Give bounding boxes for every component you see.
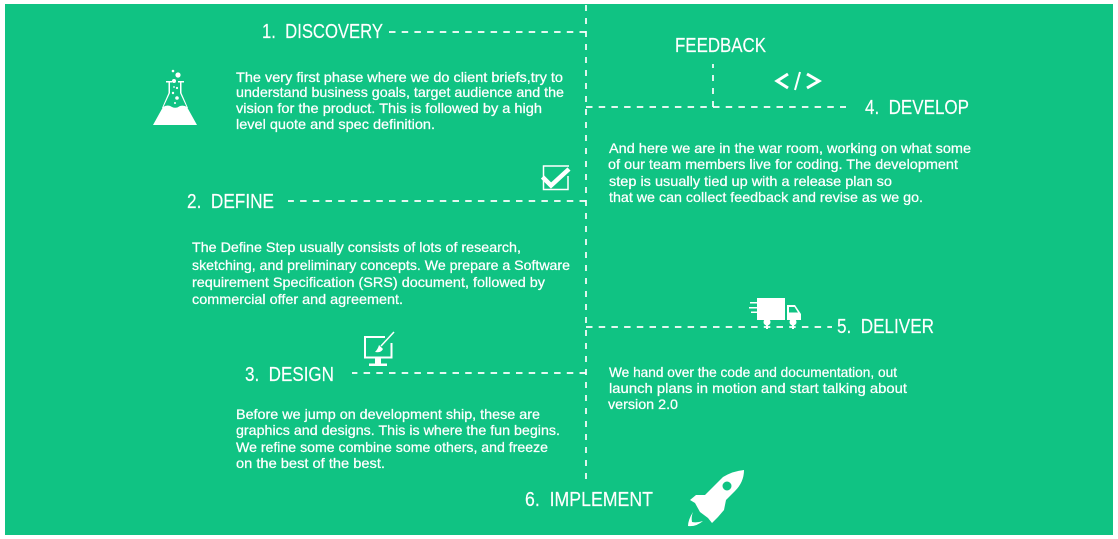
text block: deliver bbox=[608, 364, 907, 412]
connector: develop bbox=[586, 106, 846, 108]
connector: deliver bbox=[586, 326, 832, 328]
text block: design: on the best of the best. bbox=[236, 455, 385, 471]
step 1: discovery bbox=[153, 21, 564, 132]
heading: develop: 4. DEVELOP bbox=[865, 97, 969, 119]
text block: define: requirement Specification (SRS) document, followed by bbox=[192, 274, 545, 290]
step 2: define bbox=[187, 166, 570, 307]
step 6: implement bbox=[525, 470, 744, 526]
heading: implement: 6. IMPLEMENT bbox=[525, 489, 653, 511]
label: feedback: FEEDBACK bbox=[675, 35, 767, 57]
heading: design: 3. DESIGN bbox=[245, 364, 334, 386]
text block: develop: step is usually tied up with a release plan so bbox=[609, 173, 892, 189]
step 3: design bbox=[236, 332, 560, 471]
text block: deliver: launch plans in motion and start talking about bbox=[609, 380, 907, 396]
text block: discovery: vision for the product. This is followed by a high bbox=[236, 100, 542, 116]
text block: design bbox=[236, 406, 560, 471]
text block: define: sketching, and preliminary concepts. We prepare a Software bbox=[192, 257, 570, 273]
connector: feedback bbox=[712, 64, 714, 107]
text block: develop: of our team members live for coding. The development bbox=[608, 156, 958, 172]
icon: rocket bbox=[688, 470, 744, 526]
connector: define bbox=[288, 200, 586, 202]
text block: develop bbox=[608, 140, 971, 205]
icon: flask bbox=[153, 70, 197, 125]
icon: checkbox bbox=[542, 166, 569, 190]
heading: deliver: 5. DELIVER bbox=[837, 316, 934, 338]
heading: discovery: 1. DISCOVERY bbox=[262, 21, 383, 43]
text block: deliver: version 2.0 bbox=[608, 396, 678, 412]
text block: discovery bbox=[236, 69, 564, 132]
connector: design bbox=[352, 372, 586, 374]
text block: discovery: The very first phase where we do client briefs,try to bbox=[236, 69, 563, 85]
central timeline bbox=[585, 5, 587, 482]
icon: code brackets bbox=[777, 72, 819, 90]
step 5: deliver bbox=[608, 298, 934, 412]
text block: deliver: We hand over the code and documentation, out bbox=[609, 364, 897, 380]
text block: define bbox=[192, 239, 570, 307]
text block: develop: that we can collect feedback and revise as we go. bbox=[609, 189, 923, 205]
text block: discovery: level quote and spec definition. bbox=[236, 116, 435, 132]
text block: design: We refine some combine some others, and freeze bbox=[236, 439, 548, 455]
icon: delivery truck bbox=[749, 298, 801, 329]
connector: discovery bbox=[389, 31, 586, 33]
icon: monitor with brush bbox=[365, 332, 394, 366]
step 4: develop bbox=[608, 35, 971, 205]
text block: design: Before we jump on development ship, these are bbox=[236, 406, 540, 422]
heading: define: 2. DEFINE bbox=[187, 191, 274, 213]
text block: define: The Define Step usually consists of lots of research, bbox=[192, 239, 521, 255]
text block: define: commercial offer and agreement. bbox=[192, 291, 403, 307]
text block: design: graphics and designs. This is where the fun begins. bbox=[236, 422, 560, 438]
text block: discovery: understand business goals, target audience and the bbox=[236, 84, 564, 100]
text block: develop: And here we are in the war room, working on what some bbox=[609, 140, 971, 156]
